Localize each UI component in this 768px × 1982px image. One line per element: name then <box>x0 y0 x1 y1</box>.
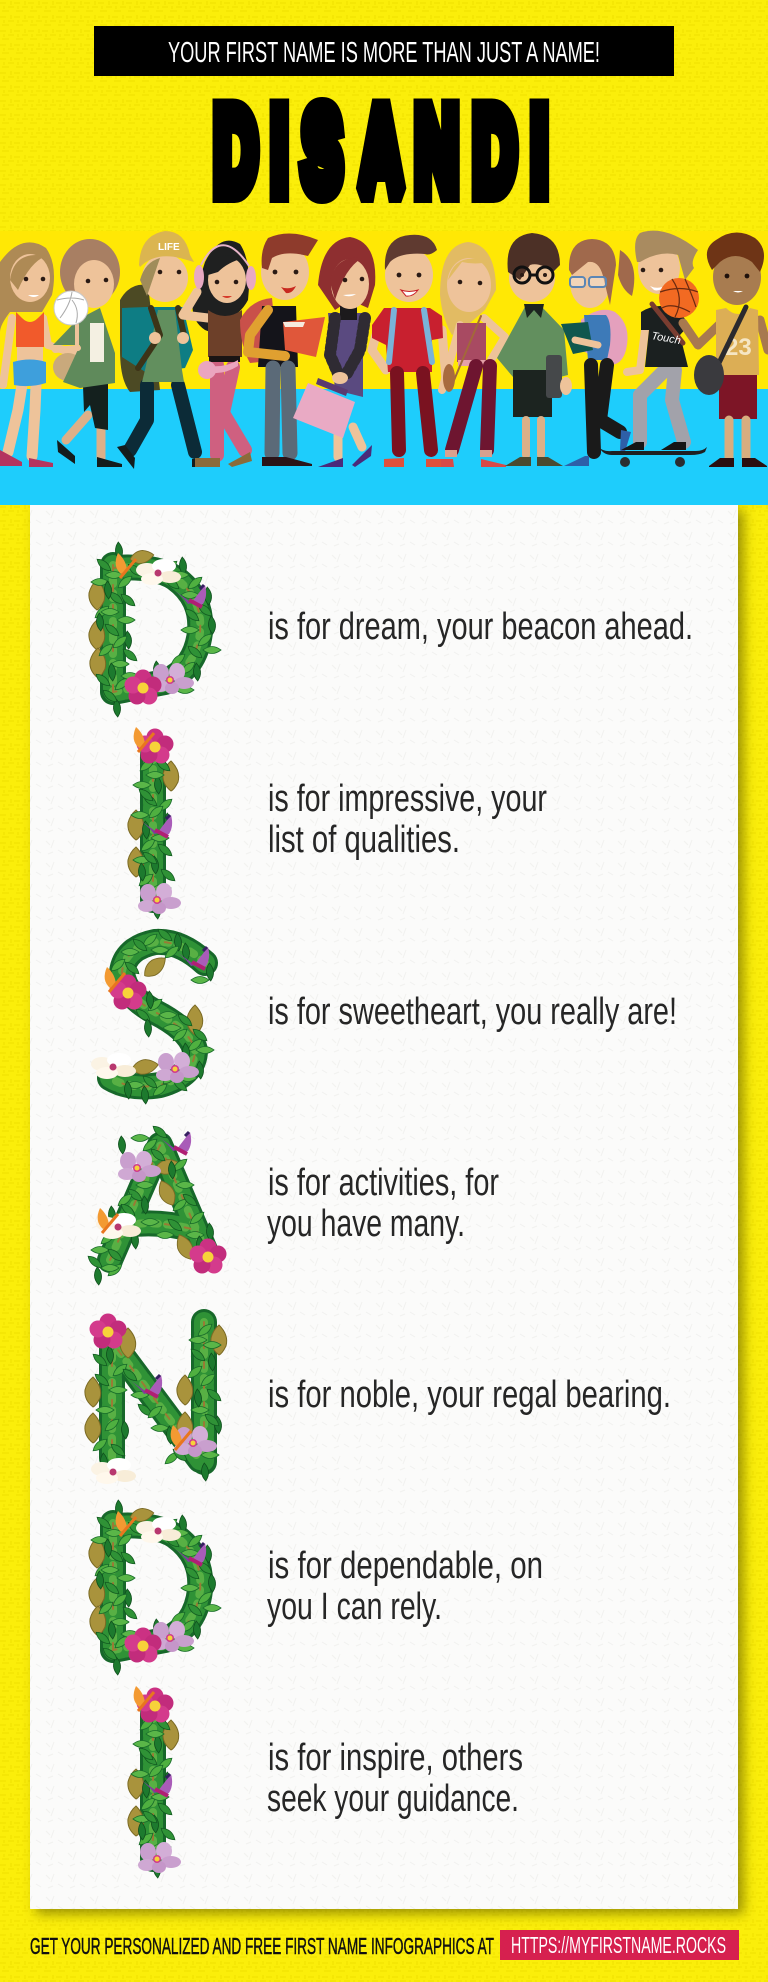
icon: pink bag <box>293 378 355 438</box>
header bar <box>94 26 674 76</box>
letter row 5: floral N <box>85 1314 227 1484</box>
text: I meaning <box>268 778 547 861</box>
character: blonde girl <box>440 242 506 467</box>
character: boy with book <box>240 233 325 466</box>
character: skateboarder with basketball <box>599 231 707 467</box>
character strip backdrop <box>0 231 768 505</box>
letter row 2: floral I <box>128 727 181 919</box>
text: I meaning: list of qualities. <box>268 819 460 861</box>
content panel <box>30 505 738 1909</box>
text: second I meaning: seek your guidance. <box>267 1778 519 1820</box>
text: second I meaning: is for inspire, others <box>268 1737 523 1779</box>
text: I meaning: is for impressive, your <box>268 778 547 820</box>
text: A meaning <box>267 1162 499 1245</box>
character: skateboarder with basketball: Touch <box>650 330 682 347</box>
character: girl in orange top <box>0 242 76 467</box>
icon: basketball <box>659 278 699 318</box>
letter row 1: floral D <box>89 542 221 717</box>
character: boy with glasses <box>497 233 572 466</box>
character: girl with ponytail <box>561 239 634 466</box>
letter row 3: floral S <box>91 927 214 1104</box>
character: boy in red shirt <box>372 235 453 467</box>
text: second D meaning: is for dependable, on <box>268 1545 543 1587</box>
character: girl with pink bag <box>293 237 375 467</box>
icon: skateboard <box>599 447 707 467</box>
text: second D meaning: you I can rely. <box>267 1586 442 1628</box>
text: second D meaning <box>267 1545 543 1628</box>
text: A meaning: you have many. <box>267 1203 465 1245</box>
letter row 4: floral A <box>86 1124 227 1285</box>
character: girl with headphones <box>183 241 256 467</box>
character: hiker with cap <box>117 231 207 469</box>
jersey number: 23 <box>725 334 752 361</box>
letter row 7: floral I <box>128 1686 181 1878</box>
name title: DISANDI <box>214 84 548 219</box>
cap label: LIFE <box>158 242 180 253</box>
character: girl with volleyball <box>53 239 122 467</box>
letter row 6: floral D <box>89 1500 221 1675</box>
character: boy in tank top <box>683 232 768 467</box>
icon: volleyball <box>54 291 88 325</box>
text: A meaning: is for activities, for <box>268 1162 499 1204</box>
text: second I meaning <box>267 1737 523 1820</box>
